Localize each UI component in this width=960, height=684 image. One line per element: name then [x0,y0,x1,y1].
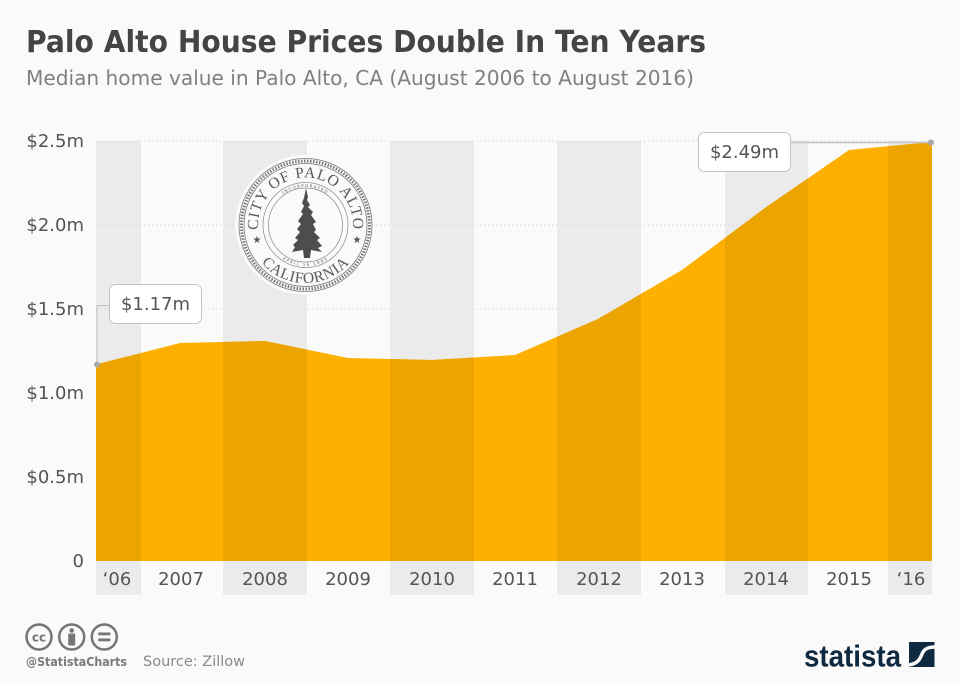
city of Palo Alto seal: APRIL 16 1894 [282,257,327,266]
grid lines [96,141,932,477]
icon: creative commons badges: cc [32,630,46,644]
area chart: median home value [96,141,932,561]
x axis labels: 2011 [492,569,538,590]
city of Palo Alto seal: CALIFORNIA [264,258,350,283]
x axis labels: 2010 [409,569,455,590]
city of Palo Alto seal: ★ [353,235,362,246]
y axis labels: $2.0m [26,215,84,236]
icon: redwood tree [292,188,322,258]
callout: $2.49m [698,132,934,172]
icon: creative commons badges [26,624,117,650]
x axis labels: 2012 [576,569,622,590]
statista logo: statista [804,638,902,674]
city of Palo Alto seal: INCORPORATED [282,184,328,194]
x axis labels: ‘06 [103,569,131,590]
callout: $2.49m: $2.49m [710,142,779,163]
callout: $1.17m: $1.17m [121,294,190,315]
x axis labels: 2015 [826,569,872,590]
icon: statista mark [908,642,935,667]
x axis labels: 2007 [158,569,204,590]
title: Palo Alto House Prices Double In Ten Years [26,25,706,60]
y axis labels: $0.5m [26,467,84,488]
callout: $1.17m [94,284,202,368]
x axis labels [103,569,925,590]
x axis labels: ‘16 [897,569,925,590]
source: Source: Zillow [143,654,245,670]
x axis labels: 2009 [325,569,371,590]
y axis labels: $1.5m [26,299,84,320]
city of Palo Alto seal [236,155,373,295]
city of Palo Alto seal: CITY OF PALO ALTO [248,167,364,230]
y axis labels [26,131,84,572]
y axis labels: $1.0m [26,383,84,404]
y axis labels: 0 [73,551,84,572]
y axis labels: $2.5m [26,131,84,152]
x axis labels: 2014 [743,569,789,590]
x axis labels: 2013 [659,569,705,590]
icon: stars: ★ [253,235,262,246]
subtitle: Median home value in Palo Alto, CA (August 2006 to August 2016) [26,66,694,90]
x axis labels: 2008 [242,569,288,590]
background year bands [96,141,932,595]
credit handle: @StatistaCharts [26,655,127,669]
